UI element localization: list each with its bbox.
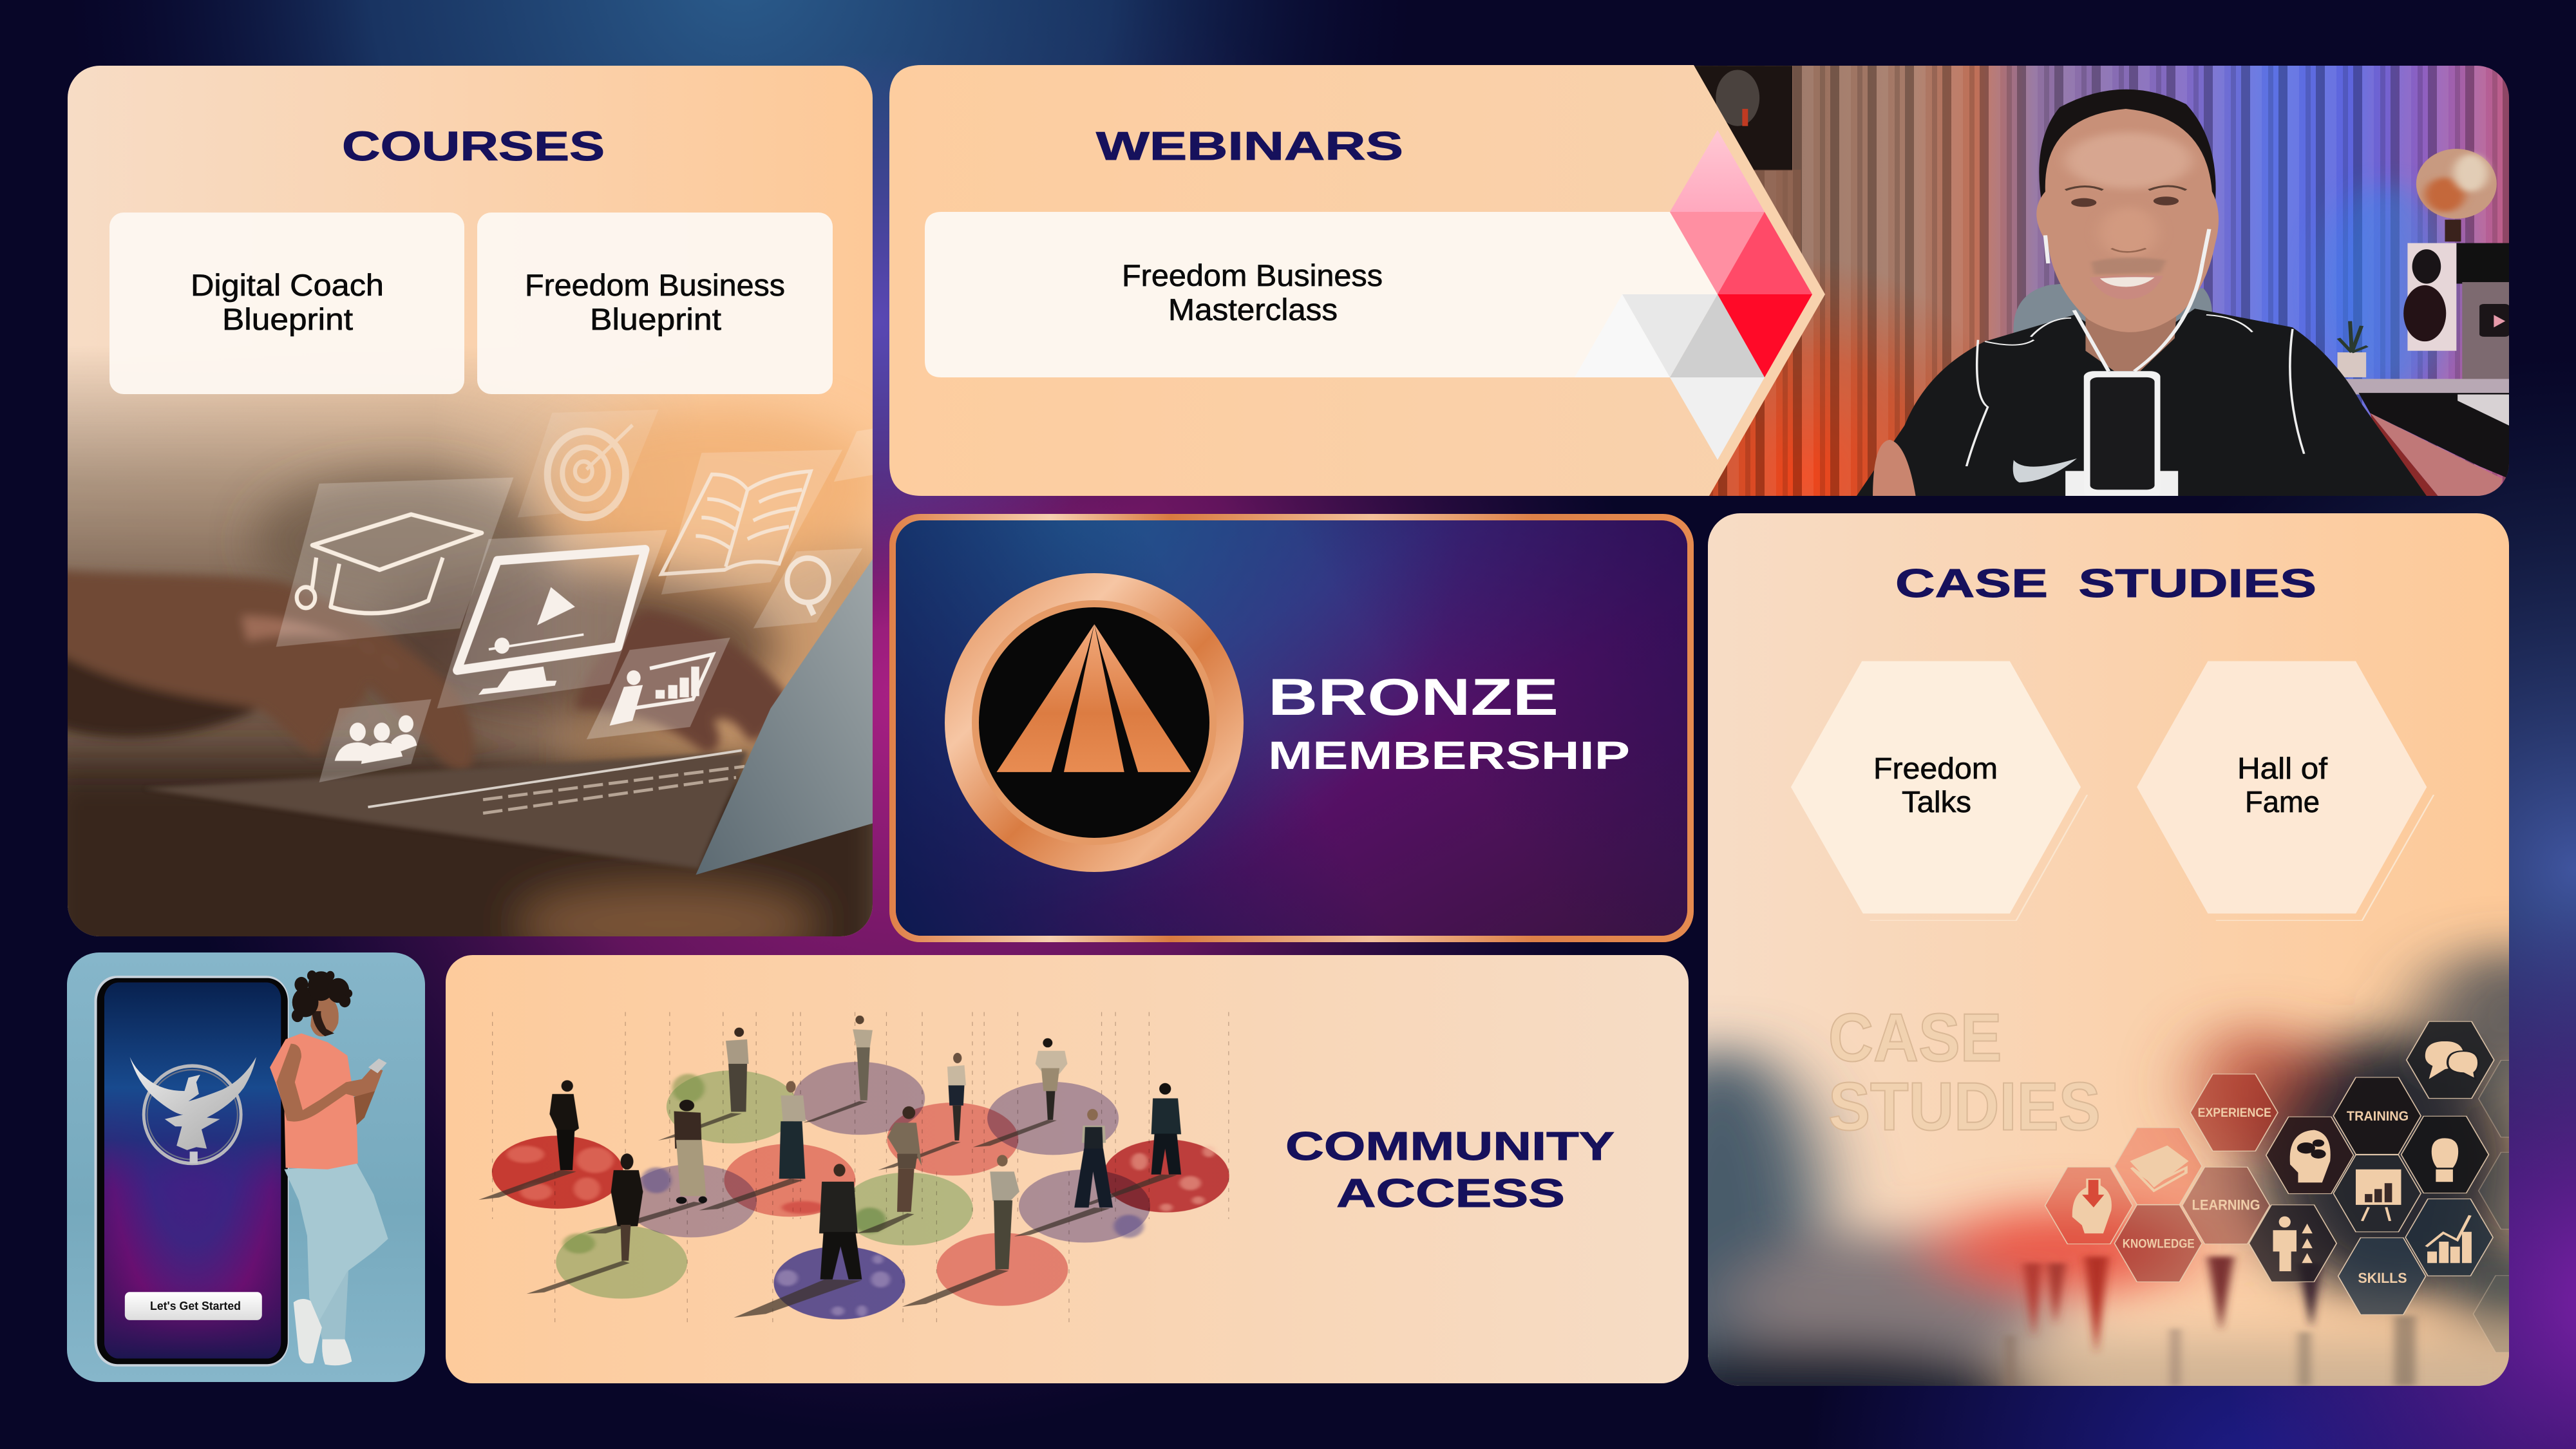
panel: webinars	[889, 65, 1825, 496]
circle textures	[507, 1074, 1215, 1317]
person with phone	[270, 971, 388, 1365]
photo: presenter in studio	[1649, 66, 2512, 498]
hexagon labels: SKILLS	[2358, 1271, 2407, 1286]
hexagon: hall of fame: Hall of	[2237, 752, 2327, 785]
ghost title: case studies: STUDIES	[1828, 1068, 2101, 1145]
far tile	[834, 428, 876, 482]
icon: magnifier tile	[753, 548, 862, 629]
button: let's get started	[125, 1292, 262, 1320]
laptop keyboard	[144, 752, 748, 869]
ghost title: case studies: CASE	[1828, 999, 2002, 1075]
thumb	[1873, 440, 1916, 498]
heading: community: COMMUNITY	[1285, 1124, 1615, 1169]
picture frame	[1686, 66, 1792, 171]
card: freedom business masterclass: Masterclass	[1168, 292, 1338, 327]
laptop photo backdrop	[68, 360, 873, 936]
hexagon icon network	[2045, 1021, 2566, 1352]
panel: mobile app	[67, 952, 425, 1382]
hexagon: freedom talks: Talks	[1902, 785, 1971, 819]
laptop screen	[696, 554, 876, 875]
hexagon labels: LEARNING	[2192, 1197, 2260, 1213]
icon: presentation chart tile	[587, 638, 730, 739]
card: digital coach blueprint: Digital Coach	[191, 268, 384, 302]
heading: case studies: CASE STUDIES	[1895, 562, 2316, 606]
chair	[2013, 282, 2212, 345]
icon: eagle logo	[130, 1057, 256, 1164]
phone mockup	[94, 976, 289, 1367]
heading: courses: COURSES	[342, 123, 605, 169]
colored circles	[492, 1062, 1229, 1320]
ghost title: case studies	[1828, 999, 2101, 1145]
card: freedom business blueprint	[477, 213, 833, 394]
card: freedom business masterclass: Freedom Business	[1122, 258, 1383, 292]
head	[2036, 90, 2219, 332]
card: freedom business masterclass	[925, 212, 1718, 377]
shadows	[478, 1101, 1177, 1318]
icon: bronze medal	[945, 573, 1244, 872]
earphones	[2045, 229, 2209, 371]
neck	[2079, 298, 2177, 371]
panel: community access	[446, 955, 1689, 1383]
heading: access: ACCESS	[1336, 1171, 1565, 1216]
globe	[2416, 149, 2497, 242]
blurred photo backdrop	[1588, 947, 2576, 1449]
icon: people tile	[319, 699, 431, 782]
icon: target tile	[518, 410, 658, 518]
hexagon labels: KNOWLEDGE	[2123, 1236, 2195, 1251]
card: digital coach blueprint: Blueprint	[222, 302, 353, 336]
torso	[1855, 308, 2428, 498]
hexagon: freedom talks: Freedom	[1873, 752, 1998, 785]
hexagon: hall of fame	[2137, 661, 2434, 920]
hexagon: freedom talks	[1791, 661, 2087, 920]
icon: triangle mosaic arrow	[1575, 130, 1812, 460]
heading: bronze: BRONZE	[1268, 668, 1558, 726]
panel: case studies	[1588, 513, 2576, 1449]
figures	[549, 1016, 1181, 1280]
desk	[2344, 379, 2509, 498]
hexagon labels: EXPERIENCE	[2198, 1105, 2271, 1120]
hexagon labels: TRAINING	[2347, 1108, 2409, 1124]
card: digital coach blueprint	[109, 213, 464, 394]
heading: membership: MEMBERSHIP	[1268, 734, 1630, 777]
heading: webinars: WEBINARS	[1096, 124, 1403, 169]
icon: open book tile	[661, 450, 842, 594]
icon: graduation cap tile	[276, 477, 513, 647]
label: let's get started: Let's Get Started	[150, 1300, 241, 1312]
panel: bronze membership	[889, 514, 1694, 942]
panel: courses	[68, 66, 873, 936]
speaker	[2403, 243, 2509, 392]
icon: video monitor tile	[437, 530, 667, 708]
dashed guide lines	[493, 1012, 1229, 1323]
hexagon labels	[2123, 1105, 2409, 1286]
card: freedom business blueprint: Blueprint	[590, 302, 721, 336]
hands	[57, 570, 788, 772]
illustration: people on circles	[478, 1012, 1229, 1323]
plant	[2338, 321, 2367, 377]
hexagon: hall of fame: Fame	[2245, 785, 2320, 819]
microphone	[2065, 371, 2178, 498]
card: freedom business blueprint: Freedom Business	[525, 268, 785, 302]
hexagon icons	[2072, 1041, 2479, 1271]
